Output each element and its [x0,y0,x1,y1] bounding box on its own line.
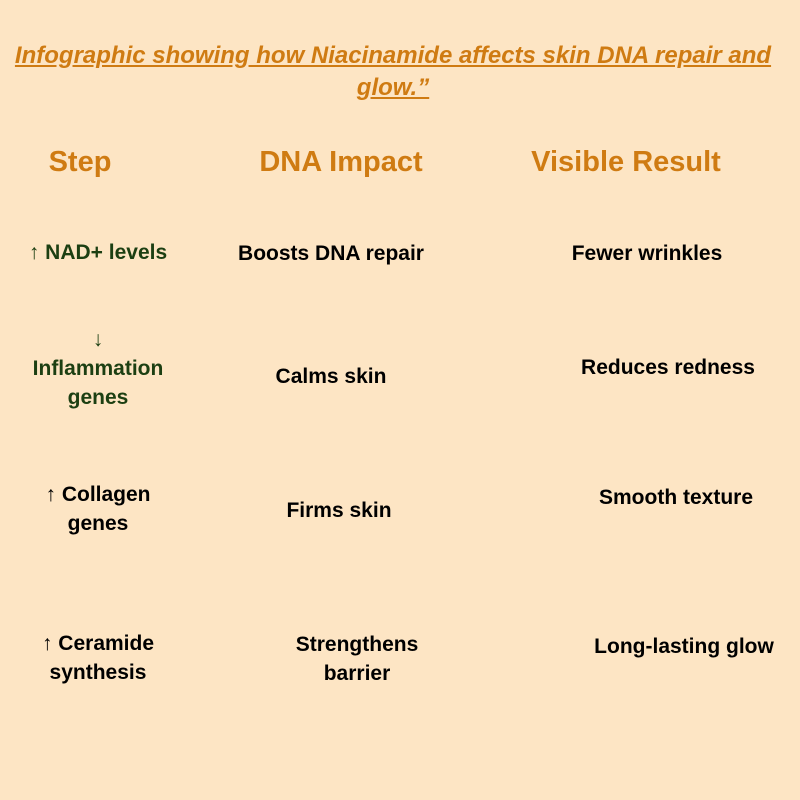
row 3 impact: Firms skin [286,499,392,522]
row 3 step: ↑ Collagen [45,483,151,506]
title: Infographic showing how Niacinamide affects skin DNA repair and glow.” [15,42,771,101]
header: Visible Result: Visible Result [531,146,721,178]
row 4 impact: barrier [324,662,390,685]
row 1 impact: Boosts DNA repair [238,242,424,265]
row 2 step: Inflammation [33,357,163,380]
row 4 step: ↑ Ceramide [42,632,154,655]
row 4 step [42,632,154,684]
row 4 step: synthesis [50,661,146,684]
header: DNA Impact: DNA Impact [259,146,423,178]
row 1 result: Fewer wrinkles [572,242,722,265]
row 2 result: Reduces redness [581,356,755,379]
row 2 step: genes [68,386,128,409]
row 2 step [33,328,163,409]
row 3 step [45,483,151,535]
row 4 result: Long-lasting glow [594,635,774,658]
row 1 step: ↑ NAD+ levels [29,241,167,264]
row 2 impact: Calms skin [276,365,386,388]
row 4 impact: Strengthens [296,633,418,656]
row 2 step: ↓ [93,328,103,351]
row 4 impact [296,633,418,685]
row 3 step: genes [68,512,128,535]
header: Step: Step [49,146,111,178]
row 3 result: Smooth texture [599,486,753,509]
